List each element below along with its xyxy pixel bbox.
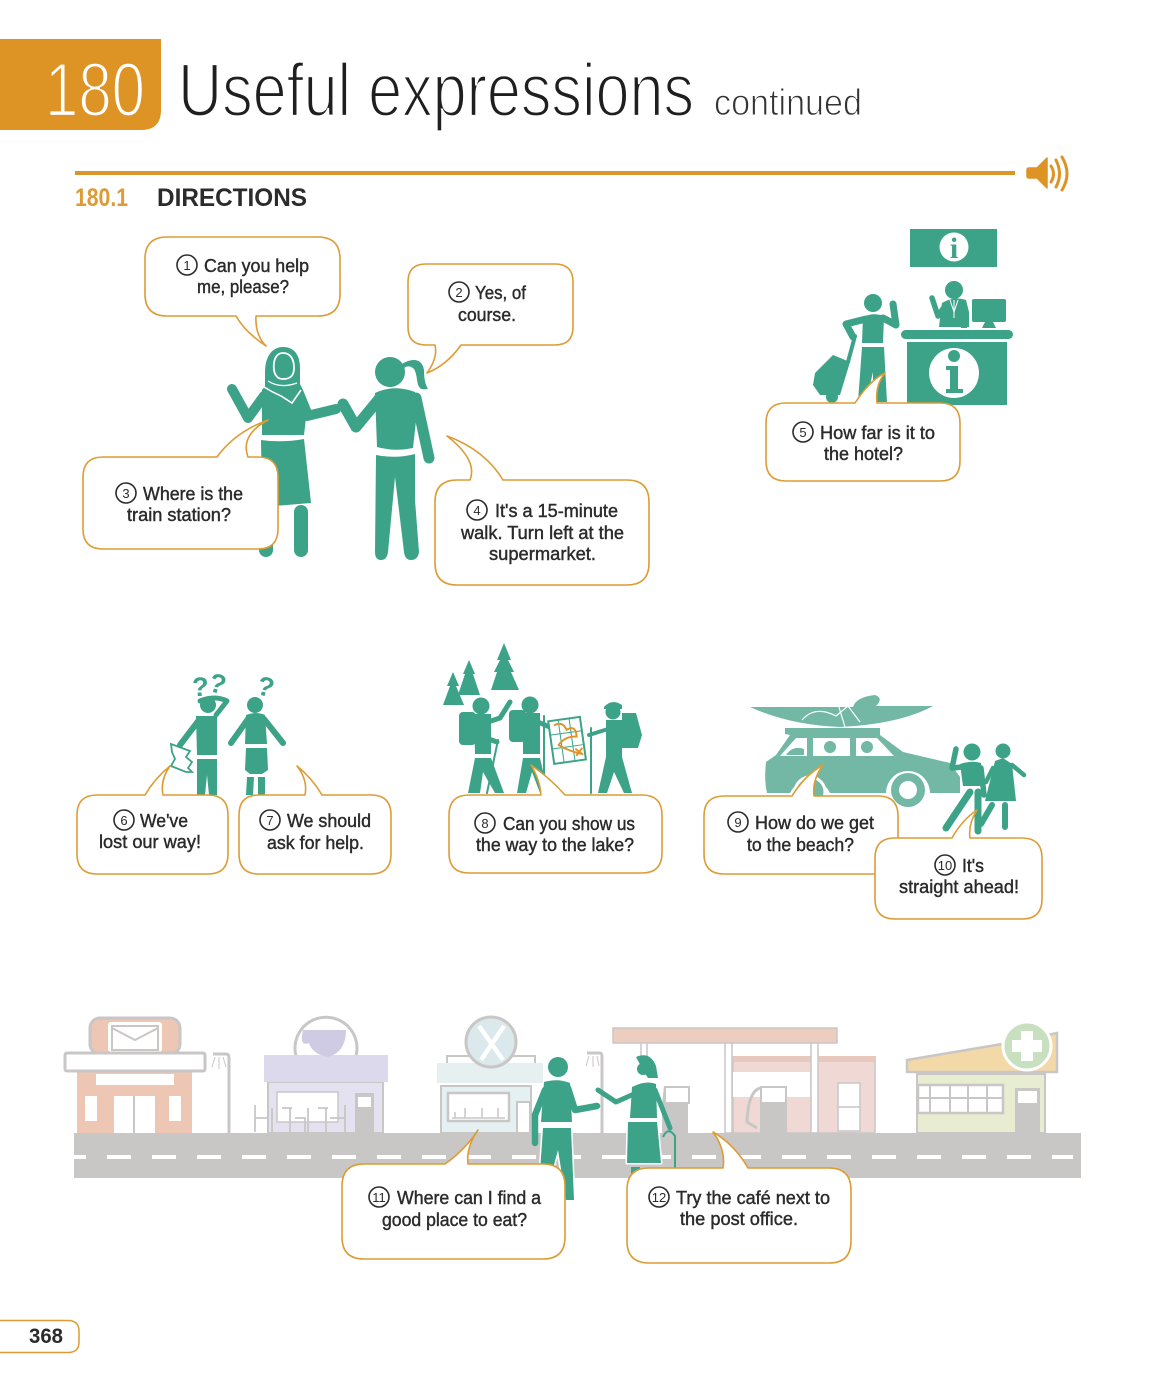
post office	[65, 1018, 205, 1134]
bubble 11: 11	[372, 1190, 386, 1205]
bubble 2: course.	[458, 305, 516, 325]
scene: street with buildings	[65, 1017, 1081, 1178]
bubble 3: Where is the	[143, 484, 243, 504]
chapter number tab: 180	[45, 48, 145, 133]
bubble 11: good place to eat?	[382, 1210, 527, 1230]
bubble 1: me, please?	[197, 277, 289, 297]
petrol station	[613, 1028, 876, 1133]
bubble 9: 9	[734, 815, 742, 830]
title: Useful expressions	[178, 48, 694, 132]
figure: man pointing	[535, 1057, 597, 1200]
bubble 7	[239, 766, 391, 874]
bubble 9: to the beach?	[747, 835, 854, 855]
bubble 5	[766, 373, 960, 481]
bubble 2	[408, 264, 573, 373]
bubble 12: Try the café next to	[676, 1188, 830, 1208]
walking man	[946, 744, 984, 831]
bubble 2: Yes, of	[475, 283, 527, 303]
bubble 7: ask for help.	[267, 833, 364, 853]
bubble 4	[435, 436, 649, 585]
header: chapter tab and title	[0, 39, 862, 133]
figure: person shrugging	[231, 697, 283, 795]
bubble 6: lost our way!	[99, 832, 201, 852]
bubble 8: the way to the lake?	[476, 835, 634, 855]
section number: 180.1	[75, 184, 128, 212]
bubble 12	[627, 1132, 851, 1263]
road	[74, 1133, 1081, 1178]
bubble 5: How far is it to	[820, 423, 935, 443]
restaurant	[437, 1017, 543, 1133]
kayak	[750, 695, 933, 727]
figure: woman with ponytail	[343, 357, 429, 560]
icon: audio speaker	[1027, 157, 1067, 190]
walking woman	[981, 744, 1024, 827]
scene: two women talking	[232, 347, 429, 560]
section heading: DIRECTIONS	[157, 184, 307, 212]
hiker 1	[459, 698, 510, 793]
trees	[443, 643, 519, 705]
cafe	[255, 1017, 388, 1133]
question marks: ?	[254, 670, 278, 704]
clerk and monitor	[932, 281, 1006, 328]
bubble 3: train station?	[127, 505, 231, 525]
bubble 5: 5	[799, 425, 807, 440]
bubble 4: walk. Turn left at the	[460, 523, 624, 543]
folded map	[548, 717, 586, 764]
bubble 8: Can you show us	[503, 814, 635, 834]
page number	[0, 1320, 79, 1352]
bubble 3	[83, 420, 278, 549]
question marks: ?	[192, 672, 208, 702]
bubble 10: straight ahead!	[899, 877, 1019, 897]
street lamp 1	[212, 1054, 229, 1133]
bubble 4: supermarket.	[489, 544, 596, 564]
bubble 6: 6	[120, 813, 128, 828]
bubble 6	[77, 766, 228, 874]
bubble 5: the hotel?	[824, 444, 903, 464]
question marks	[192, 667, 278, 704]
bubble 4: 4	[473, 503, 481, 518]
pharmacy	[907, 1022, 1057, 1133]
tourist with suitcase	[813, 294, 896, 403]
bubble 8: 8	[481, 816, 489, 831]
bubble 9	[704, 765, 898, 874]
scene: car with kayak and walkers	[750, 695, 1024, 831]
bubble 7: 7	[266, 813, 274, 828]
hiker 3	[589, 702, 642, 793]
desk	[901, 330, 1013, 405]
car	[765, 728, 960, 807]
scene: hikers with map	[443, 643, 642, 793]
figure: woman with cane	[598, 1055, 675, 1175]
bubble 6: We've	[140, 811, 188, 831]
bubble 8	[449, 765, 662, 873]
information sign: i	[950, 232, 958, 265]
scene: tourist information desk	[813, 229, 1013, 405]
bubble 10: 10	[938, 858, 952, 873]
figure: woman in headscarf	[232, 347, 336, 550]
bubble 12: the post office.	[680, 1209, 798, 1229]
bubble 1: 1	[183, 258, 191, 273]
section rule	[75, 171, 1015, 175]
bubble 2: 2	[455, 285, 463, 300]
title suffix: continued	[714, 82, 862, 123]
bubble 4: It's a 15-minute	[495, 501, 618, 521]
street lamp 2	[586, 1053, 602, 1133]
bubble 10	[875, 810, 1042, 919]
question marks: ?	[206, 667, 230, 701]
hiker 2	[509, 696, 552, 793]
scene: two lost people	[171, 667, 283, 795]
bubble 11: Where can I find a	[397, 1188, 542, 1208]
bubble 11	[342, 1130, 565, 1259]
bubble 3: 3	[122, 486, 130, 501]
figure: person with map	[171, 697, 227, 795]
bubble 7: We should	[287, 811, 371, 831]
bubble 1: Can you help	[204, 256, 309, 276]
bubble 12: 12	[652, 1190, 666, 1205]
page number: 368	[29, 1325, 63, 1348]
bubble 1	[145, 237, 340, 346]
bubble 10: It's	[962, 856, 984, 876]
information sign	[910, 229, 997, 267]
chapter number tab	[0, 39, 161, 133]
bubble 9: How do we get	[755, 813, 874, 833]
